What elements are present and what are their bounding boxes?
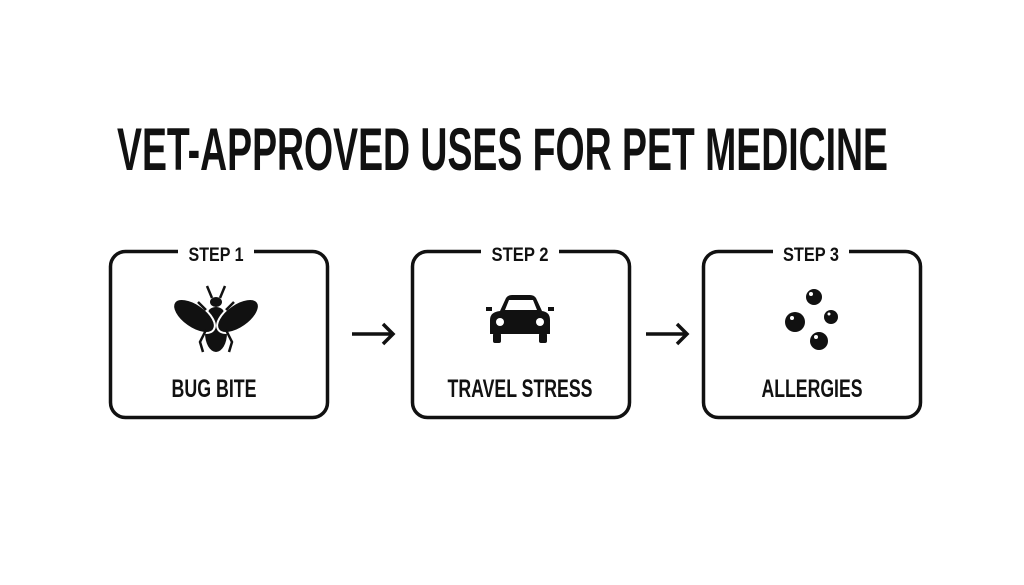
label: travel stress: TRAVEL STRESS xyxy=(448,375,592,403)
step 3 label: STEP 3 xyxy=(783,245,839,266)
icon: car xyxy=(486,295,554,343)
label: bug bite: BUG BITE xyxy=(172,375,256,403)
icon: bug xyxy=(167,286,265,352)
arrow 1 xyxy=(352,324,393,344)
step 2 label: STEP 2 xyxy=(492,245,548,266)
panel: step 1 xyxy=(110,240,328,418)
panel: step 3 xyxy=(704,240,920,418)
arrow 2 xyxy=(646,324,687,344)
label: allergies: ALLERGIES xyxy=(762,375,862,403)
icon: allergen dots xyxy=(785,289,838,350)
panel: step 2 xyxy=(412,240,630,418)
step 1 label: STEP 1 xyxy=(188,245,244,266)
